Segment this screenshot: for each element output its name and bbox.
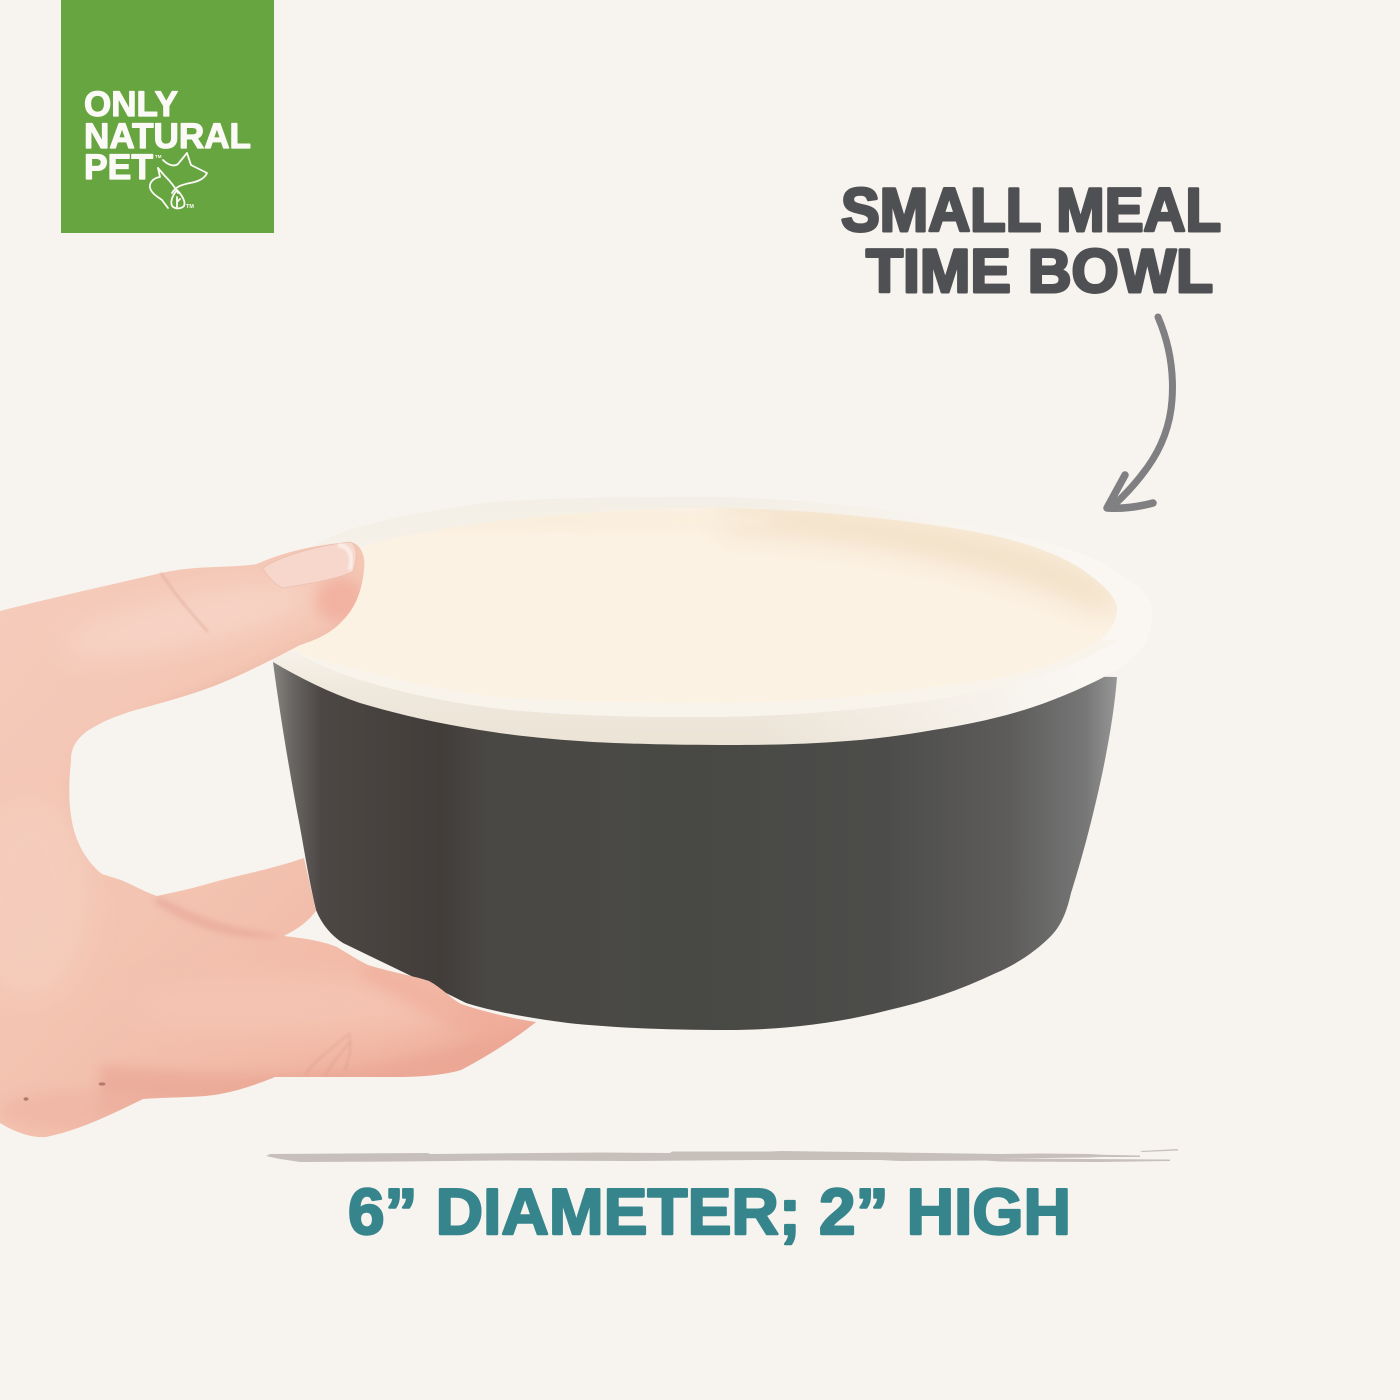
bowl rim right highlight bbox=[760, 500, 1152, 745]
logo: Only Natural Pet: TM bbox=[186, 204, 194, 210]
hand holding bowl bbox=[0, 542, 540, 1137]
bowl rim lip bbox=[293, 640, 1117, 717]
divider brush stroke bbox=[266, 1149, 1178, 1162]
logo: Only Natural Pet: NATURAL bbox=[84, 117, 251, 156]
knuckle wrinkles bbox=[305, 1032, 350, 1076]
heading: small meal time bowl: TIME BOWL bbox=[866, 237, 1213, 305]
logo: Only Natural Pet bbox=[61, 0, 274, 233]
logo: Only Natural Pet: PET bbox=[84, 148, 153, 187]
logo: Only Natural Pet: ONLY bbox=[84, 85, 178, 124]
arrow pointing to bowl bbox=[1107, 317, 1172, 508]
bowl bbox=[271, 497, 1152, 1030]
hand shading bbox=[0, 568, 540, 1130]
thumbnail bbox=[263, 542, 356, 588]
hand silhouette bbox=[0, 542, 536, 1137]
heading: small meal time bowl bbox=[841, 176, 1221, 305]
heading: small meal time bowl: SMALL MEAL bbox=[841, 176, 1221, 244]
infographic canvas bbox=[0, 0, 1221, 1246]
dimensions caption: 6” DIAMETER; 2” HIGH bbox=[348, 1175, 1071, 1248]
bowl body bbox=[273, 662, 1117, 1030]
bowl inside bbox=[336, 508, 1117, 703]
knuckle crease bbox=[161, 573, 208, 632]
freckles bbox=[24, 1082, 106, 1101]
logo: Only Natural Pet: TM bbox=[155, 154, 162, 159]
bowl rim outer bbox=[271, 497, 1152, 745]
